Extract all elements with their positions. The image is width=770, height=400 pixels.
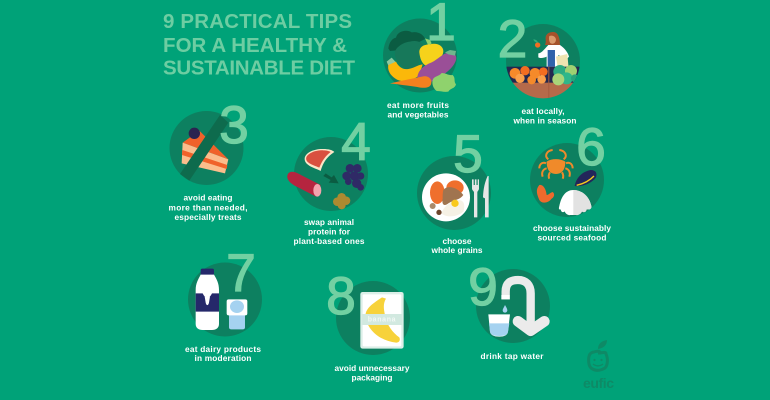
caption 3: more than needed, [168, 202, 248, 212]
number 7: 7 [226, 244, 256, 303]
icon: packaged banana: banana [368, 317, 396, 324]
icon: vegetables [383, 18, 457, 92]
number 3: 3 [219, 96, 249, 155]
caption 8: avoid unnecessary [334, 363, 410, 373]
caption 1 [387, 100, 449, 120]
number 6: 6 [576, 118, 606, 177]
caption 6: choose sustainably [533, 223, 611, 233]
tip 9: tap water [468, 258, 550, 361]
number 8: 8 [326, 267, 356, 326]
caption 5: whole grains [430, 245, 483, 255]
tip 8: avoid packaging [326, 267, 410, 382]
caption 1: and vegetables [388, 110, 449, 120]
logo: eufic [583, 340, 614, 391]
caption 3: avoid eating [184, 192, 232, 202]
tip 5: whole grains [417, 125, 491, 255]
caption 7: eat dairy products [185, 344, 261, 354]
title [163, 10, 355, 80]
title: SUSTAINABLE DIET [163, 56, 355, 80]
caption 5 [430, 236, 483, 255]
number 5: 5 [453, 125, 483, 184]
logo: eufic: eufic [583, 375, 614, 391]
icon: cake slice crossed out [170, 111, 244, 185]
caption 7: in moderation [194, 353, 252, 363]
caption 9: drink tap water [480, 351, 544, 361]
caption 6: sourced seafood [538, 232, 606, 242]
caption 4: plant-based ones [294, 236, 365, 246]
tip 6: sustainable seafood [530, 118, 611, 242]
icon: milk bottle and yogurt [188, 262, 262, 336]
title: 9 PRACTICAL TIPS [163, 10, 352, 33]
caption 3: especially treats [174, 212, 242, 222]
tip 1: fruits and vegetables [383, 0, 457, 120]
tip 3: avoid overeating [168, 96, 249, 222]
tip 2: eat locally [500, 19, 580, 124]
caption 4: protein for [308, 226, 351, 236]
caption 4: swap animal [304, 217, 354, 227]
caption 6 [533, 223, 611, 242]
icon: plate with cutlery [417, 156, 491, 230]
number 2: 2 [498, 10, 527, 69]
icon: meat and plant proteins [287, 137, 368, 211]
caption 2: eat locally, [522, 106, 564, 116]
caption 8 [334, 363, 410, 382]
caption 7 [185, 344, 261, 363]
caption 3 [168, 192, 248, 222]
tip 7: dairy in moderation [185, 244, 262, 363]
caption 5: choose [442, 236, 472, 246]
icon: seafood [530, 143, 604, 217]
caption 8: packaging [352, 372, 392, 382]
title: FOR A HEALTHY & [163, 34, 347, 57]
icon: market stall [505, 24, 583, 101]
caption 1: eat more fruits [387, 100, 449, 110]
caption 2: when in season [512, 116, 576, 126]
number 9: 9 [468, 258, 498, 317]
number 4: 4 [341, 113, 371, 172]
tip 4: swap animal protein [287, 113, 371, 246]
caption 2 [512, 106, 576, 126]
caption 4 [294, 217, 365, 246]
icon: tap and glass [476, 269, 550, 343]
